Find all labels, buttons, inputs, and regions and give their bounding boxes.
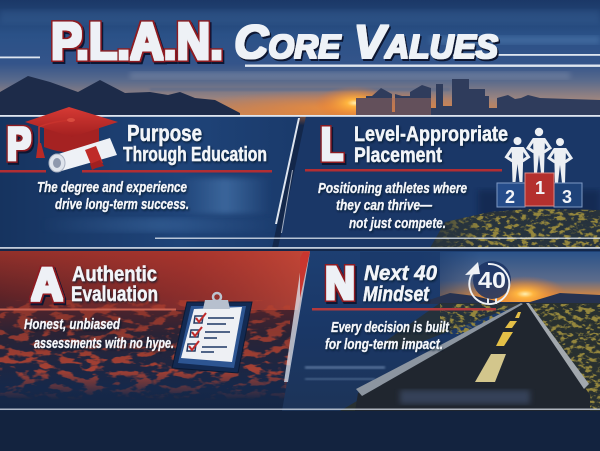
- heading: [71, 263, 158, 306]
- rule: [312, 308, 496, 310]
- letter L: L: [321, 118, 343, 170]
- icon: 40 sign with arrow: [465, 261, 511, 304]
- road: [355, 303, 590, 411]
- section: L: [305, 118, 582, 232]
- panel: authentic evaluation: [0, 251, 310, 411]
- dividers: [0, 54, 600, 410]
- panel: bottom strip: [0, 411, 600, 451]
- description: Positioning athletes where: [318, 180, 467, 197]
- heading: Through Education: [123, 144, 267, 166]
- icon: clipboard: [172, 293, 252, 373]
- mountains: [0, 76, 240, 116]
- rule: [0, 170, 272, 172]
- icon: graduation cap and diploma: [25, 107, 118, 172]
- title: P.L.A.N.: P.L.A.N.: [51, 13, 223, 71]
- rule: [305, 169, 502, 172]
- letter P: P: [7, 118, 31, 170]
- description: [37, 179, 189, 213]
- description: for long-term impact.: [325, 336, 443, 353]
- title: [51, 13, 498, 71]
- title: core values: Core Values: [234, 15, 498, 68]
- icon: 40 sign with arrow: 40: [478, 267, 506, 293]
- heading: Next 40: [364, 262, 437, 285]
- icon: podium with athletes: 1: [535, 178, 545, 198]
- description: The degree and experience: [37, 179, 187, 196]
- heading: Purpose: [127, 120, 202, 146]
- description: assessments with no hype.: [34, 335, 174, 352]
- heading: [123, 120, 267, 166]
- icon: podium with athletes: 3: [562, 187, 572, 207]
- heading: Level-Appropriate: [354, 123, 508, 146]
- distant hills: [420, 293, 600, 304]
- field texture: [430, 208, 600, 248]
- section: A: [0, 258, 252, 373]
- heading: Evaluation: [71, 283, 158, 306]
- panel: next 40 mindset: [282, 251, 600, 411]
- description: Honest, unbiased: [24, 316, 121, 333]
- letter A: A: [31, 258, 63, 310]
- heading: Mindset: [363, 283, 430, 306]
- description: they can thrive—: [336, 197, 433, 214]
- field: [340, 303, 600, 411]
- letter N: N: [325, 257, 355, 309]
- icon: podium with athletes: 2: [505, 187, 515, 207]
- panel: sky header: [0, 0, 600, 126]
- description: [24, 316, 174, 352]
- heading: Placement: [354, 144, 442, 167]
- heading: [363, 262, 437, 306]
- icon: podium with athletes: [497, 128, 582, 207]
- description: [325, 319, 450, 353]
- section: P: [0, 107, 272, 213]
- heading: Authentic: [72, 263, 157, 286]
- description: Every decision is built: [331, 319, 450, 336]
- city skyline: [356, 79, 600, 116]
- section: N: [312, 257, 511, 353]
- rule: [0, 308, 176, 310]
- description: drive long-term success.: [55, 196, 189, 213]
- panel: level-appropriate placement: [278, 116, 600, 248]
- panel: purpose: [0, 116, 300, 248]
- description: [318, 180, 467, 232]
- description: not just compete.: [349, 215, 446, 232]
- heading: [354, 123, 508, 167]
